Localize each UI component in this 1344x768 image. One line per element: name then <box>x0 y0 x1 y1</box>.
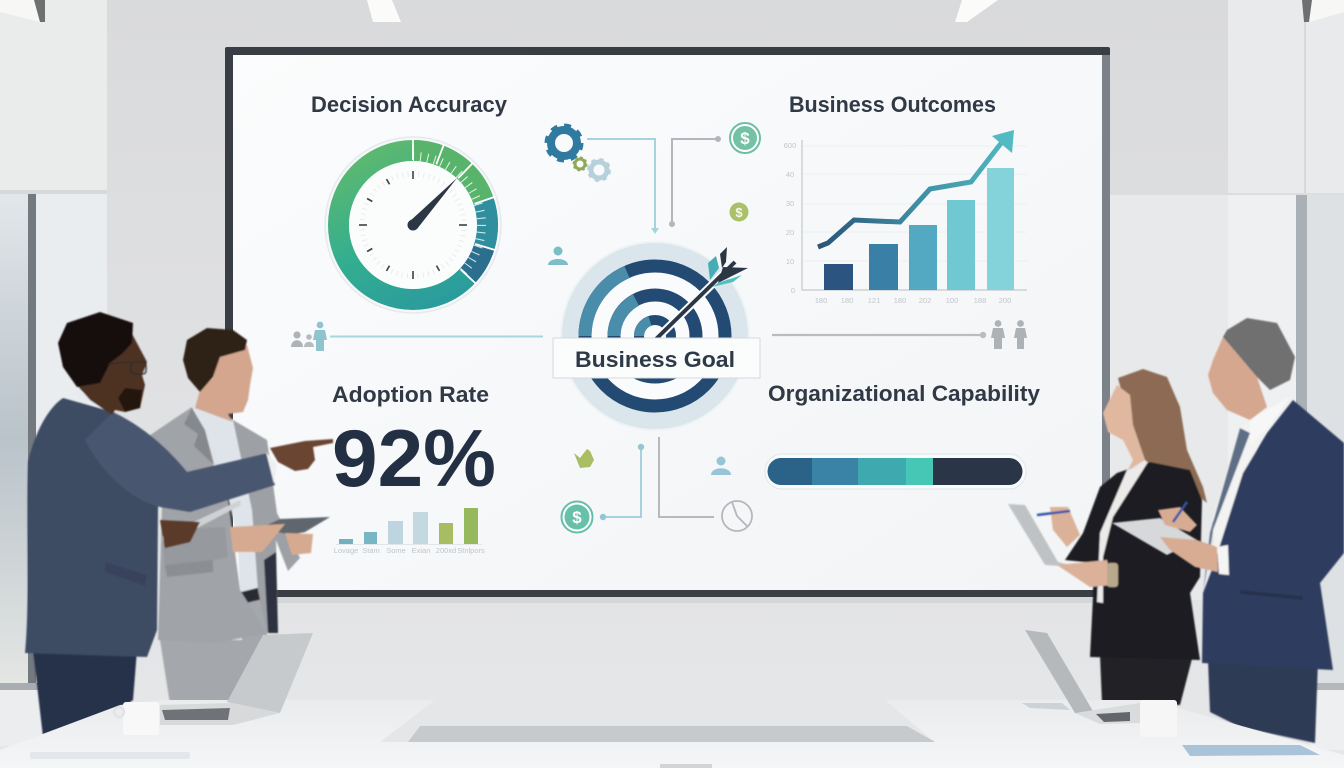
gauge needle <box>408 178 457 230</box>
heading: Adoption Rate: Adoption Rate <box>332 382 489 407</box>
bar and line chart: 10 <box>786 257 794 266</box>
trousers <box>160 592 267 704</box>
jacket lining <box>264 552 278 633</box>
icon: dollar small <box>730 202 748 222</box>
upper hand <box>1158 507 1197 532</box>
tie <box>1203 428 1250 593</box>
mini bar chart: Stam <box>362 546 380 555</box>
window left <box>0 0 107 746</box>
folder on table <box>1182 745 1320 756</box>
bar and line chart: 180 <box>815 296 827 305</box>
pen <box>1037 511 1070 515</box>
gauge <box>325 137 501 313</box>
beard <box>118 388 142 412</box>
glasses <box>108 362 146 374</box>
collar <box>1250 397 1290 445</box>
hair <box>58 312 133 387</box>
icon: dollar bottom <box>562 502 592 532</box>
icon: people right <box>991 320 1027 349</box>
heading: Organizational Capability: Organizational Capability <box>768 381 1041 406</box>
hands <box>230 524 313 555</box>
neck and face <box>195 345 253 422</box>
arm <box>85 412 275 512</box>
hand <box>270 439 333 471</box>
tablet <box>263 517 330 535</box>
face <box>1103 385 1145 470</box>
pocket <box>165 560 213 577</box>
screen <box>233 55 1102 590</box>
sleeve <box>162 527 228 570</box>
lower hand <box>1160 537 1218 572</box>
bar and line chart <box>784 130 1027 305</box>
laptop right <box>1022 630 1140 724</box>
icon: dollar top <box>730 123 760 153</box>
connector: dollar to goal <box>669 136 721 227</box>
connector: gears to goal <box>587 139 659 234</box>
bar and line chart: 0 <box>791 286 795 295</box>
connector: dollar bottom <box>600 444 644 520</box>
hands <box>1050 507 1113 587</box>
pocket <box>1240 590 1303 600</box>
bar and line chart: 180 <box>894 296 906 305</box>
jacket <box>1065 462 1202 660</box>
progress bar <box>765 454 1026 489</box>
icon: thumbs hand green <box>574 449 594 468</box>
icon: people left <box>291 322 327 351</box>
person: man in grey suit <box>143 328 330 704</box>
bar and line chart: 188 <box>974 296 986 305</box>
icon: person blue <box>711 456 731 475</box>
heading: Decision Accuracy: Decision Accuracy <box>311 92 508 117</box>
icon: dollar top: $ <box>740 129 750 148</box>
collar <box>70 391 113 414</box>
watch <box>1107 563 1118 587</box>
bar and line chart: 40 <box>786 170 794 179</box>
icon: clock <box>722 501 752 531</box>
jacket main <box>143 407 267 643</box>
icon: dollar bottom: $ <box>572 508 582 527</box>
screen frame <box>225 47 1110 597</box>
connector left: people to goal <box>330 336 543 338</box>
shirt <box>190 405 267 596</box>
bar and line chart: 20 <box>786 228 794 237</box>
bar and line chart: 30 <box>786 199 794 208</box>
icon: gears <box>547 126 610 180</box>
mini bar chart: Lovage <box>334 546 358 555</box>
shirt <box>1213 397 1290 560</box>
heading: Business Outcomes: Business Outcomes <box>789 92 996 117</box>
mini bar chart: 200xd <box>436 546 456 555</box>
lower wall shadow <box>233 597 1103 603</box>
icon: person teal <box>548 246 568 265</box>
mini bar chart <box>334 508 485 555</box>
belt <box>241 586 267 604</box>
tablet <box>1112 518 1197 555</box>
conference table <box>0 700 1344 768</box>
mini bar chart: Stnlpors <box>457 546 485 555</box>
hair <box>1118 369 1207 503</box>
target: business goal <box>553 242 760 430</box>
face <box>77 330 147 415</box>
laptop left <box>160 633 313 725</box>
lapel <box>184 408 214 465</box>
jacket <box>25 398 158 657</box>
trousers <box>33 650 137 737</box>
mug right <box>1140 700 1177 737</box>
bar and line chart: 600 <box>784 141 796 150</box>
person: man in navy suit pointing <box>25 312 333 737</box>
person: older man in navy suit <box>1112 318 1344 743</box>
blouse <box>1097 462 1148 603</box>
person: woman in black suit <box>1008 369 1207 705</box>
icon: dollar small: $ <box>735 205 743 220</box>
trousers <box>1208 660 1318 743</box>
bar and line chart: 121 <box>868 296 880 305</box>
bar and line chart: 200 <box>999 296 1011 305</box>
bar and line chart: 202 <box>919 296 931 305</box>
tablet <box>162 500 241 545</box>
jacket <box>1202 400 1344 670</box>
connector: clock <box>659 437 714 517</box>
stat: 92%: 92% <box>332 414 496 504</box>
label: Business Goal <box>553 338 760 378</box>
hair <box>1223 318 1295 390</box>
bar and line chart: 100 <box>946 296 958 305</box>
connector right: goal to people <box>772 332 986 338</box>
pocket <box>105 562 147 586</box>
face <box>1208 337 1267 420</box>
cuff <box>1217 545 1229 575</box>
trousers <box>1100 655 1193 705</box>
pen <box>1173 502 1187 522</box>
cuff <box>266 452 277 484</box>
jacket right panel <box>233 420 300 633</box>
ceiling lights <box>0 0 1344 22</box>
mug left <box>114 702 159 735</box>
left hand <box>160 520 200 548</box>
arrow in target <box>655 247 748 340</box>
bar and line chart: 180 <box>841 296 853 305</box>
mini bar chart: Some <box>386 546 406 555</box>
laptop held <box>1008 504 1078 567</box>
label: Business Goal: Business Goal <box>575 347 735 372</box>
mini bar chart: Exian <box>412 546 430 555</box>
hair <box>183 328 247 392</box>
window right <box>1110 0 1344 750</box>
